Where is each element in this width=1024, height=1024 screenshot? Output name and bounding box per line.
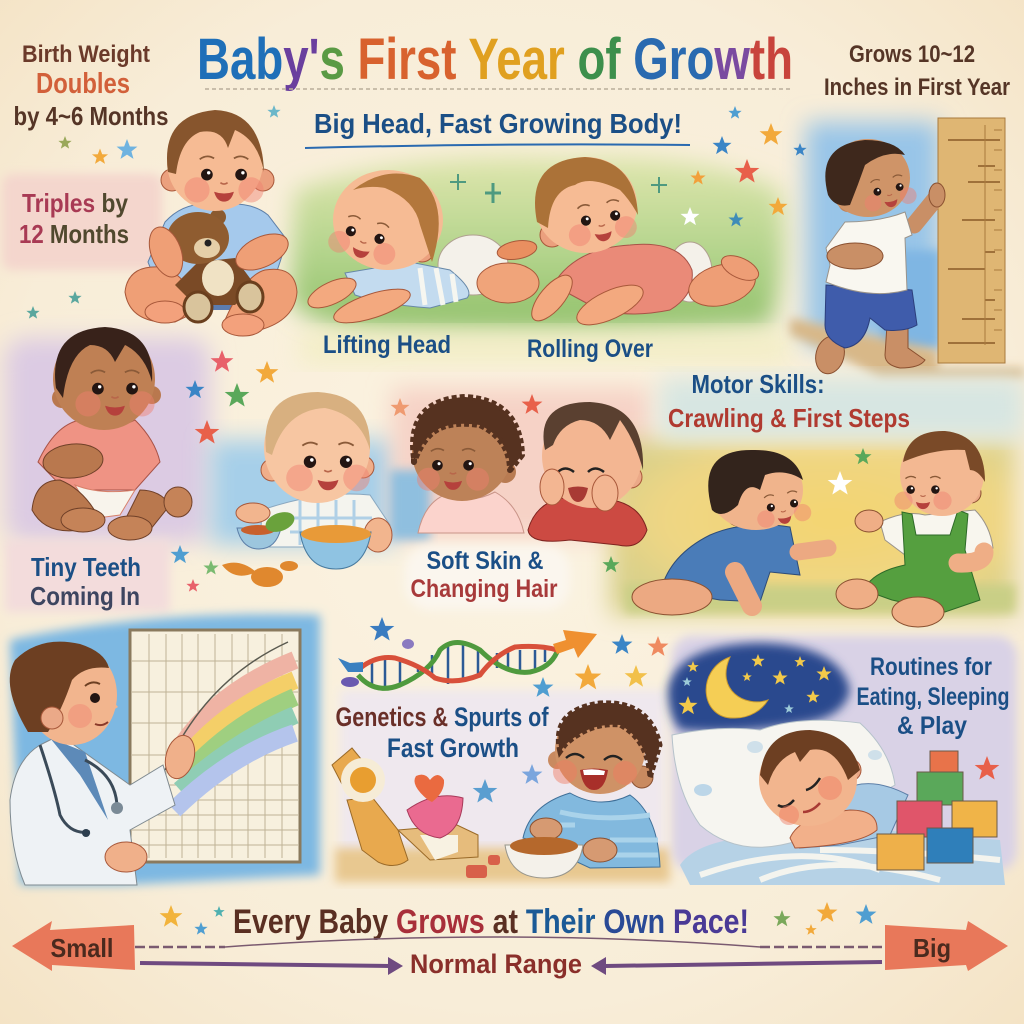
small arrow [12,921,135,971]
background washes [2,122,1024,885]
label: soft skin: Soft Skin & [426,547,544,575]
label: motor skills: Motor Skills: [692,369,824,399]
toy blocks [877,751,997,870]
baby covering face [528,402,647,546]
text: triples [19,188,129,249]
laughing baby with bowl [505,703,660,878]
label: tiny teeth: Coming In [30,581,140,611]
label: routines: & Play [897,712,967,740]
bed with sleeping baby [672,720,1005,885]
baby standing at ruler [812,139,945,377]
label: genetics: Fast Growth [387,733,519,763]
label: genetics [336,702,549,763]
title: Baby's First Year of Growth [197,27,793,92]
subtitle: Big Head, Fast Growing Body! [314,108,682,139]
label: tiny teeth [30,552,141,611]
doctor [10,642,199,885]
dna helix [358,630,597,688]
baby with teddy [125,110,297,336]
baby lifting head [304,170,539,330]
growth chart [130,630,300,862]
label: genetics: Genetics & Spurts of [336,702,549,732]
rainbow growth curves [165,642,295,810]
normal range label: Normal Range [410,949,582,979]
sparkles on grass [450,174,667,203]
label: soft skin: Changing Hair [410,575,558,603]
small blobs near dna [338,639,414,687]
ruler [938,118,1005,363]
text: triples: Triples by [22,188,128,218]
label: motor skills [668,369,910,433]
label: routines [856,653,1010,740]
text: triples: 12 Months [19,219,129,249]
text: birth weight doubles [14,41,168,131]
small arrow: Small [50,933,114,963]
text: grows 10-12 inches [824,41,1010,101]
text: birth weight doubles: by 4~6 Months [14,101,168,131]
baby sitting: teeth [32,327,192,540]
teddy bear [163,209,263,322]
label: tiny teeth: Tiny Teeth [31,552,141,582]
big arrow [885,921,1008,971]
toys and food [332,748,500,878]
text: birth weight doubles: Birth Weight [22,41,150,68]
baby eating [222,392,392,587]
stars [26,105,999,935]
big arrow: Big [913,933,951,963]
text: birth weight doubles: Doubles [36,68,130,100]
baby crawling [632,450,828,615]
night sky with moon [678,654,832,718]
label: motor skills: Crawling & First Steps [668,403,910,433]
label: rolling over: Rolling Over [527,335,653,363]
text: grows 10-12 inches: Grows 10~12 [849,41,975,68]
baby in green overalls [836,431,993,627]
label: routines: Routines for [870,653,992,681]
curly baby [412,397,524,533]
label: lifting head: Lifting Head [323,331,451,359]
range lines [135,937,885,975]
baby rolling over [525,157,762,333]
growth arrow [553,630,597,658]
label: soft skin [410,547,558,603]
slogan: Every Baby Grows at Their Own Pace! [233,903,749,941]
